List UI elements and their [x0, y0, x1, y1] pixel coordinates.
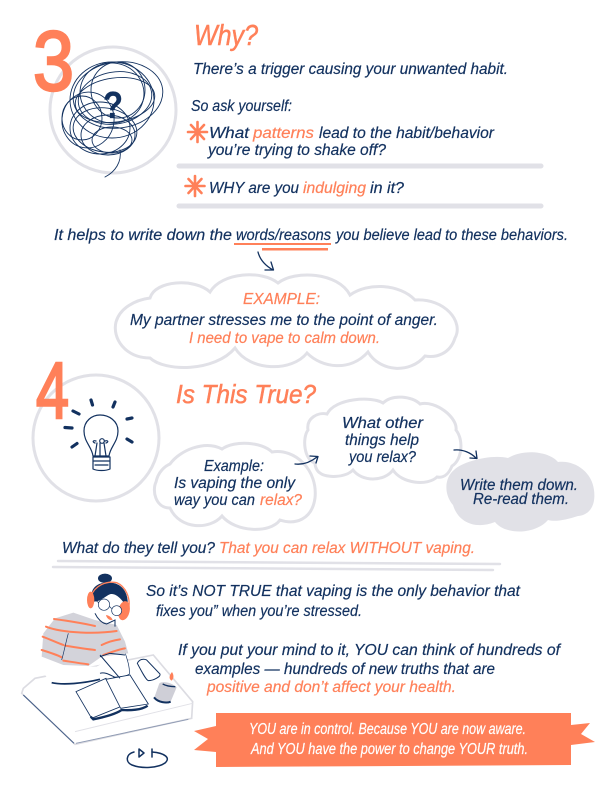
heading: Why?: Why? [194, 20, 259, 52]
text: Write them down. [460, 477, 578, 494]
text: Is vaping the only [174, 475, 296, 492]
text: things help [345, 432, 419, 449]
text: Re-read them. [473, 491, 569, 508]
glasses [96, 599, 122, 616]
text: why indulging: indulging [303, 180, 366, 197]
panel: section 4 icon [33, 346, 159, 501]
text: not true: So it’s NOT TRUE that vaping is the only behavior that [146, 583, 521, 600]
text: way you can [174, 492, 255, 509]
text: write down the words: you believe lead to these behaviors. [335, 227, 568, 244]
panel: section 3 icon [33, 14, 176, 177]
bullet 1 [188, 122, 495, 159]
book [76, 675, 148, 719]
icon: asterisk [186, 176, 204, 196]
numeral 3: 3 [33, 14, 74, 108]
shirt [42, 613, 128, 666]
text: patterns question: patterns [252, 125, 314, 142]
banner: And YOU have the power to change YOUR truth. [250, 741, 528, 758]
banner [194, 713, 595, 767]
text [342, 415, 424, 466]
text: what do they tell you [62, 540, 475, 557]
text: patterns question: lead to the habit/behavior [319, 125, 495, 142]
arm and torso [43, 652, 129, 685]
text: put your mind to it: examples — hundreds of new truths that are [195, 661, 495, 678]
cloud shape [154, 443, 315, 529]
panel: example cloud [115, 275, 457, 368]
text: example: My partner stresses me to the point of anger. [130, 312, 438, 329]
panel: cloud example [154, 443, 315, 529]
phone [137, 659, 160, 681]
text: put your mind to it: If you put your mind to it, YOU can think of hundreds of [178, 642, 562, 659]
text: write down the words: It helps to write down the [54, 227, 232, 244]
illustration: person writing at desk [22, 574, 193, 744]
cloud shape [115, 275, 457, 368]
hair [92, 582, 128, 608]
cloud shape [446, 452, 594, 532]
text: example: I need to vape to calm down. [189, 330, 380, 347]
text: What other [342, 415, 424, 432]
icon: asterisk [188, 122, 207, 142]
numeral 4: 4 [36, 346, 69, 435]
panel: cloud write them down [446, 452, 594, 532]
desk [22, 655, 193, 744]
shirt stripes [42, 619, 125, 664]
text: why indulging: WHY are you [209, 180, 299, 197]
icon: scribble [58, 56, 167, 177]
text: what do they tell you: What do they tell you? [62, 540, 215, 557]
text: write down the words: words/reasons [236, 227, 331, 244]
panel: cloud what other things [305, 397, 461, 482]
text: not true: fixes you” when you’re stressed. [156, 603, 362, 620]
icon: circle [50, 47, 176, 173]
arrow: to what other [295, 456, 318, 464]
icon: circle [33, 375, 159, 501]
text: Example: [204, 458, 264, 475]
text: not true [146, 583, 521, 620]
candle [154, 672, 177, 702]
pencil and hand [100, 655, 120, 678]
banner text: YOU are in control. Because YOU are now aware. [249, 721, 526, 738]
banner shape [194, 713, 595, 767]
icon: question mark: ? [103, 85, 123, 127]
text [460, 477, 578, 508]
cloud shape [305, 397, 461, 482]
headphones [91, 582, 129, 608]
icon: light bulb [84, 415, 118, 470]
text [174, 458, 302, 509]
arrow: down to example [258, 252, 274, 270]
text: patterns question: you’re trying to shake off? [207, 142, 386, 159]
text: example [130, 291, 438, 347]
text: trigger: There’s a trigger causing your unwanted habit. [193, 61, 508, 78]
heading: is this true: Is This True? [176, 379, 317, 409]
head [94, 585, 127, 623]
text: put your mind to it [178, 642, 562, 696]
text: write down the words [54, 227, 568, 244]
arrow: to write them down [454, 450, 477, 458]
text: relax? [260, 492, 302, 509]
bullet 2 [186, 176, 404, 197]
text: put your mind to it: positive and don’t affect your health. [206, 679, 456, 696]
text: patterns question: What [209, 125, 250, 142]
underlines [234, 243, 331, 250]
text: so ask yourself: So ask yourself: [191, 98, 292, 115]
mouth [106, 615, 113, 620]
icon: loop arrow [127, 749, 167, 767]
text: what do they tell you: That you can relax WITHOUT vaping. [219, 540, 475, 557]
text: you relax? [348, 449, 416, 466]
shirt folds [62, 633, 68, 660]
text: patterns question [207, 125, 495, 159]
text: why indulging [209, 180, 404, 197]
text: why indulging: in it? [370, 180, 404, 197]
text: example: EXAMPLE: [243, 291, 320, 308]
icon: light rays [65, 400, 132, 447]
